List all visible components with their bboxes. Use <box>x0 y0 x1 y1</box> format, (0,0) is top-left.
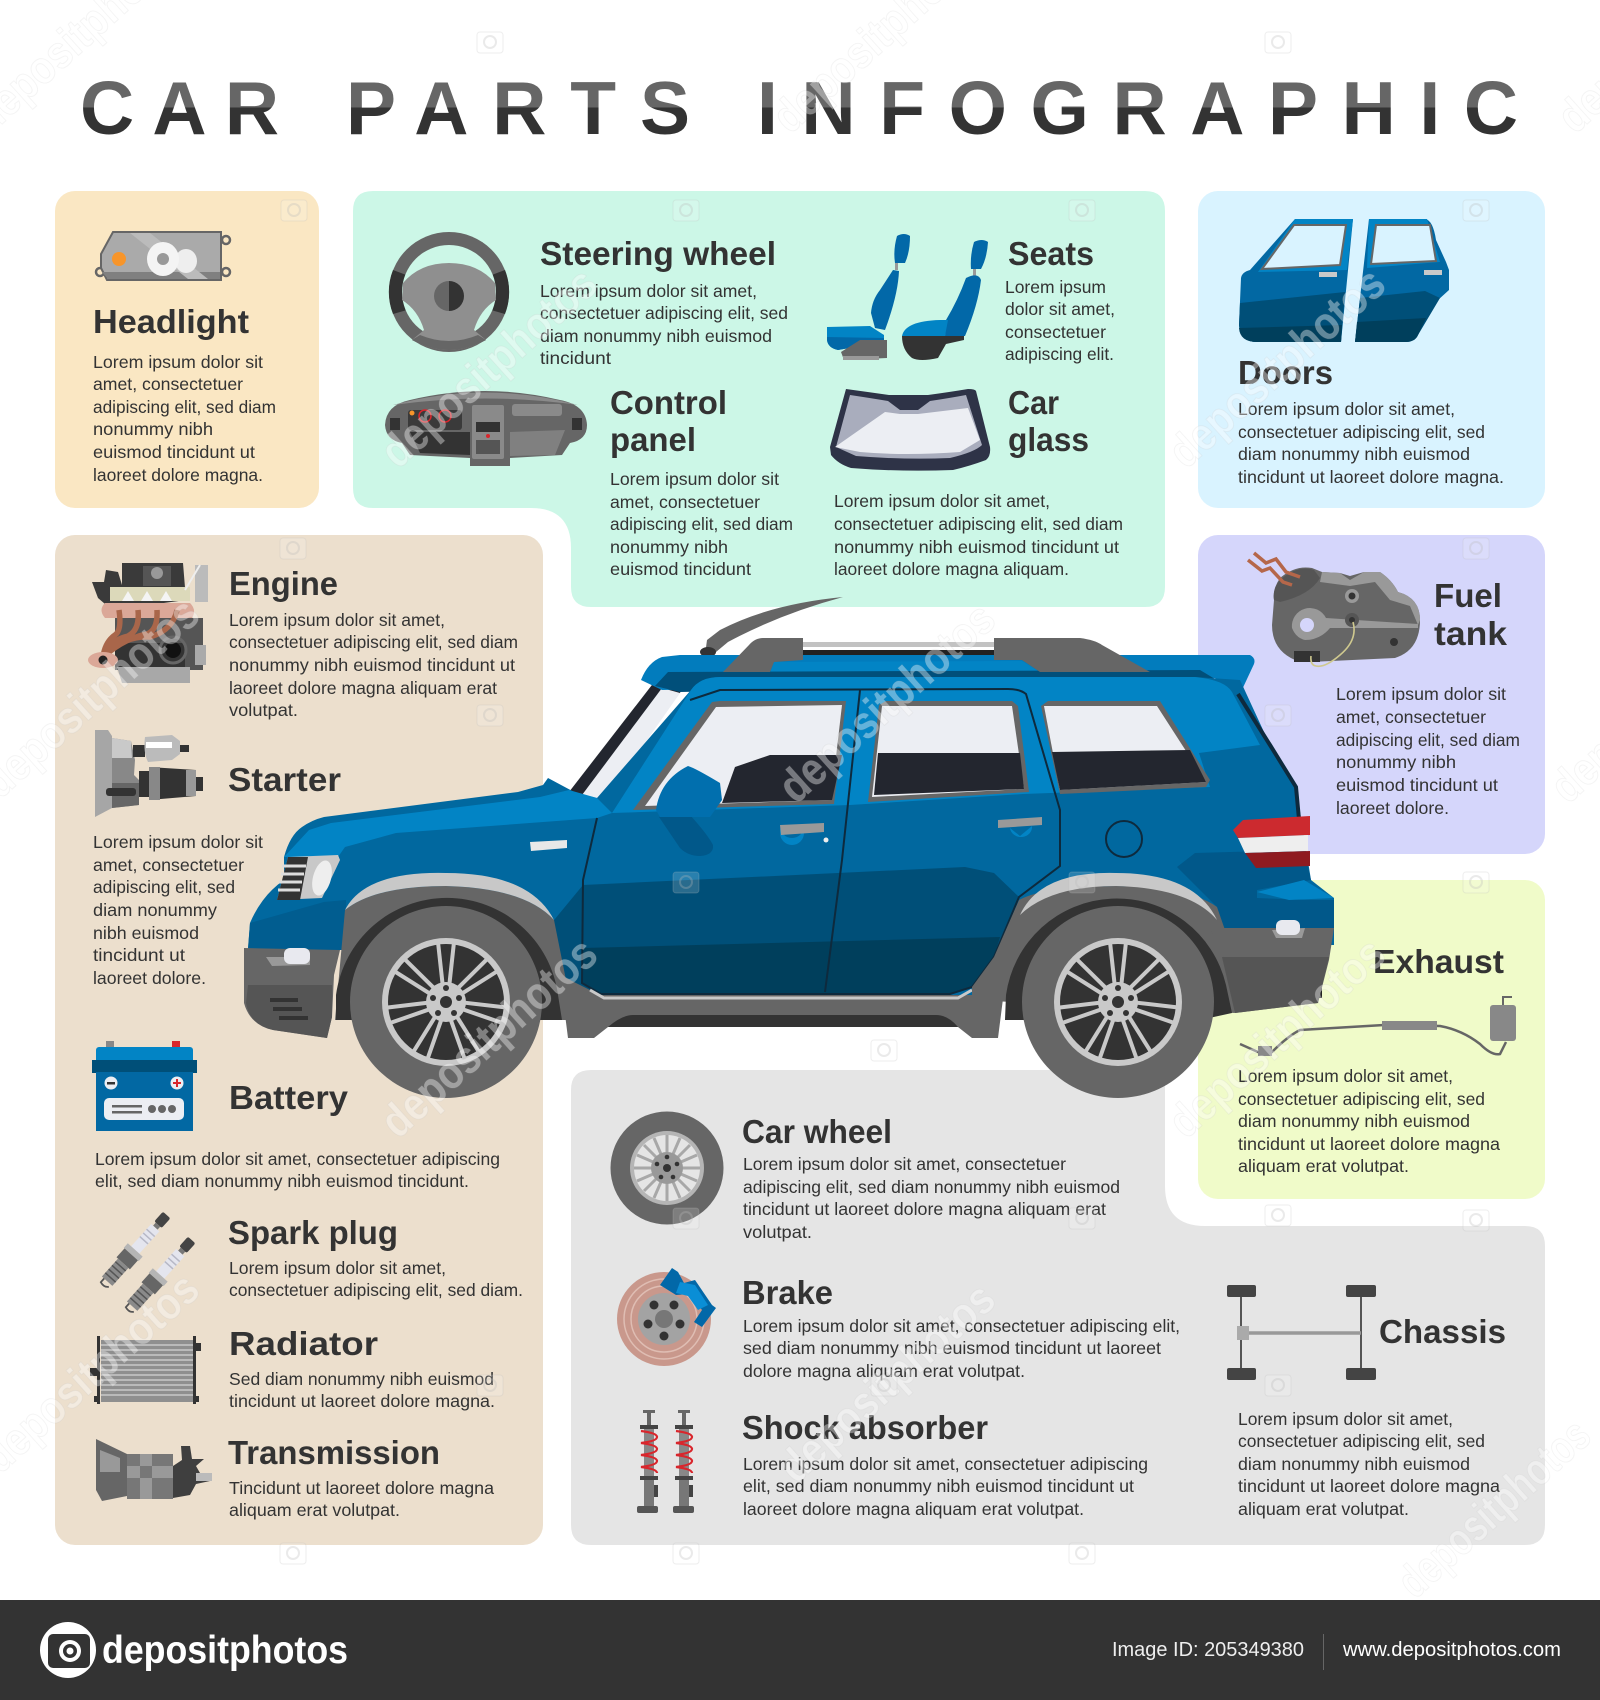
text block: starter: Lorem ipsum dolor sit <box>93 832 263 852</box>
heading: Control panel: panel <box>610 421 696 458</box>
text block: starter: tincidunt ut <box>93 945 185 965</box>
icon: fuel tank <box>1248 553 1420 666</box>
icon: steering wheel <box>389 232 509 352</box>
text block: chassis: aliquam erat volutpat. <box>1238 1499 1409 1519</box>
text block: chassis <box>1238 1409 1500 1519</box>
door lines <box>582 689 1060 994</box>
icon: headlight <box>96 232 230 280</box>
heading: Control panel <box>610 384 727 458</box>
text block: exhaust: Lorem ipsum dolor sit amet, <box>1238 1066 1453 1086</box>
heading: Radiator: Radiator <box>229 1325 378 1362</box>
text block: control panel: nonummy nibh <box>610 537 728 557</box>
text block: fuel tank <box>1336 684 1520 818</box>
text block: car wheel: volutpat. <box>743 1222 812 1242</box>
text block: transmission: aliquam erat volutpat. <box>229 1500 400 1520</box>
icon: spark plugs <box>96 1208 199 1317</box>
website: www.depositphotos.com <box>1342 1639 1561 1661</box>
text block: chassis: diam nonummy nibh euismod <box>1238 1454 1470 1474</box>
icon: battery <box>92 1041 197 1131</box>
text block: chassis: tincidunt ut laoreet dolore magna <box>1238 1476 1500 1496</box>
text block: shock absorber: Lorem ipsum dolor sit amet, consectetuer adipiscing <box>743 1454 1148 1474</box>
text block: starter: amet, consectetuer <box>93 855 244 875</box>
text block: exhaust: aliquam erat volutpat. <box>1238 1156 1409 1176</box>
rear arch <box>972 886 1235 1013</box>
text block: engine <box>229 610 518 720</box>
fuel cap <box>1106 821 1142 857</box>
heading: Fuel tank: tank <box>1434 615 1508 652</box>
text block: battery: elit, sed diam nonummy nibh euismod tincidunt. <box>95 1171 469 1191</box>
window: front <box>633 701 846 810</box>
text block: doors: tincidunt ut laoreet dolore magna. <box>1238 467 1504 487</box>
heading: Battery: Battery <box>229 1079 349 1116</box>
text block: brake <box>743 1316 1180 1381</box>
front arch <box>335 886 570 1020</box>
watermarks: depositphotos <box>1158 927 1395 1147</box>
text block: seats: dolor sit amet, <box>1005 299 1115 319</box>
text block: fuel tank: laoreet dolore. <box>1336 798 1449 818</box>
text block: radiator <box>229 1369 495 1411</box>
headlight <box>277 855 340 900</box>
watermarks: depositphotos <box>370 257 607 477</box>
text block: fuel tank: Lorem ipsum dolor sit <box>1336 684 1506 704</box>
text block: seats: Lorem ipsum <box>1005 277 1106 297</box>
text block: exhaust: consectetuer adipiscing elit, sed <box>1238 1089 1485 1109</box>
tail light <box>1233 816 1310 838</box>
text block: fuel tank: nonummy nibh <box>1336 752 1456 772</box>
heading: Car glass <box>1008 384 1089 458</box>
text block: car wheel: Lorem ipsum dolor sit amet, consectetuer <box>743 1154 1066 1174</box>
panel: exhaust <box>1198 880 1545 1199</box>
side mirror <box>659 815 713 856</box>
heading: Shock absorber: Shock absorber <box>742 1409 988 1446</box>
text block: seats: adipiscing elit. <box>1005 344 1114 364</box>
logo: depositphotos camera <box>40 1622 96 1678</box>
text block: shock absorber <box>743 1454 1148 1519</box>
heading: Exhaust: Exhaust <box>1373 943 1504 980</box>
heading: Seats: Seats <box>1008 235 1094 272</box>
text block: fuel tank: amet, consectetuer <box>1336 707 1486 727</box>
text block: control panel: adipiscing elit, sed diam <box>610 514 793 534</box>
text block: doors: Lorem ipsum dolor sit amet, <box>1238 399 1455 419</box>
panel: running gear <box>571 1070 1545 1545</box>
text block: starter: nibh euismod <box>93 923 199 943</box>
rear wheel <box>1022 906 1214 1098</box>
heading: Headlight: Headlight <box>93 303 249 340</box>
panel: doors <box>1198 191 1545 508</box>
icon: doors <box>1239 219 1449 342</box>
title: PARTS <box>346 66 690 150</box>
window: middle <box>868 701 1029 802</box>
text block: engine: consectetuer adipiscing elit, sed diam <box>229 632 518 652</box>
text block: brake: dolore magna aliquam erat volutpat. <box>743 1361 1025 1381</box>
icon: chassis <box>1227 1285 1376 1380</box>
text block: control panel: Lorem ipsum dolor sit <box>610 469 779 489</box>
text block: exhaust <box>1238 1066 1500 1176</box>
icon: car wheel <box>610 1112 724 1224</box>
text block: engine: laoreet dolore magna aliquam erat <box>229 678 497 698</box>
panel: interior parts <box>353 191 1165 607</box>
text block: engine: nonummy nibh euismod tincidunt ut <box>229 655 515 675</box>
text block: headlight: adipiscing elit, sed diam <box>93 397 276 417</box>
text block: starter <box>93 832 263 988</box>
heading: Starter: Starter <box>228 761 341 798</box>
roof rails <box>723 638 1150 672</box>
text block: seats <box>1005 277 1115 364</box>
text block: headlight: laoreet dolore magna. <box>93 465 263 485</box>
front bumper <box>244 948 340 1038</box>
text block: chassis: consectetuer adipiscing elit, sed <box>1238 1431 1485 1451</box>
heading: Fuel tank <box>1434 577 1508 652</box>
text block: radiator: Sed diam nonummy nibh euismod <box>229 1369 494 1389</box>
text block: car wheel <box>743 1154 1120 1242</box>
logo wordmark: depositphotos <box>102 1629 348 1672</box>
watermarks: depositphotos <box>370 927 607 1147</box>
heading: Fuel tank: Fuel <box>1434 577 1502 614</box>
text block: control panel: amet, consectetuer <box>610 492 760 512</box>
text block: doors: consectetuer adipiscing elit, sed <box>1238 422 1485 442</box>
text block: spark plug <box>229 1258 523 1300</box>
text block: car glass <box>834 491 1123 579</box>
panel: fuel tank <box>1198 535 1545 854</box>
text block: headlight: Lorem ipsum dolor sit <box>93 352 263 372</box>
text block: car wheel: adipiscing elit, sed diam nonummy nibh euismod <box>743 1177 1120 1197</box>
window: rear <box>1041 701 1210 794</box>
panel: headlight <box>55 191 319 508</box>
door handles <box>780 826 804 845</box>
heading: Car glass: glass <box>1008 421 1089 458</box>
watermarks: depositphotos <box>768 592 1005 812</box>
text block: control panel: euismod tincidunt <box>610 559 751 579</box>
text block: battery: Lorem ipsum dolor sit amet, consectetuer adipiscing <box>95 1149 500 1169</box>
icon: seats <box>827 234 988 360</box>
text block: steering wheel <box>540 281 788 368</box>
text block: chassis: Lorem ipsum dolor sit amet, <box>1238 1409 1453 1429</box>
watermarks: depositphotos <box>768 1272 1005 1492</box>
illustration: blue SUV <box>244 597 1334 1098</box>
text block: engine: volutpat. <box>229 700 298 720</box>
icon: shock absorbers <box>637 1410 694 1513</box>
icon: brake <box>617 1268 716 1366</box>
icon: radiator <box>90 1336 201 1404</box>
text block: radiator: tincidunt ut laoreet dolore magna. <box>229 1391 495 1411</box>
text block: exhaust: diam nonummy nibh euismod <box>1238 1111 1470 1131</box>
text block: doors: diam nonummy nibh euismod <box>1238 444 1470 464</box>
roof bars <box>803 642 994 647</box>
text block: starter: adipiscing elit, sed <box>93 877 235 897</box>
text block: car glass: consectetuer adipiscing elit, sed diam <box>834 514 1123 534</box>
icon: exhaust <box>1240 997 1516 1056</box>
text block: starter: diam nonummy <box>93 900 217 920</box>
title: CAR <box>80 66 279 150</box>
text block: starter: laoreet dolore. <box>93 968 206 988</box>
icon: engine <box>88 563 208 683</box>
text block: brake: sed diam nonummy nibh euismod tincidunt ut laoreet <box>743 1338 1161 1358</box>
text block: spark plug: Lorem ipsum dolor sit amet, <box>229 1258 446 1278</box>
rear bumper <box>1210 928 1334 1013</box>
text block: seats: consectetuer <box>1005 322 1106 342</box>
heading: Steering wheel: Steering wheel <box>540 235 776 272</box>
title <box>80 66 1518 150</box>
text block: car glass: laoreet dolore magna aliquam. <box>834 559 1069 579</box>
text block: spark plug: consectetuer adipiscing elit, sed diam. <box>229 1280 523 1300</box>
text block: exhaust: tincidunt ut laoreet dolore magna <box>1238 1134 1500 1154</box>
text block: car glass: Lorem ipsum dolor sit amet, <box>834 491 1050 511</box>
text block: headlight: euismod tincidunt ut <box>93 442 255 462</box>
text block: steering wheel: consectetuer adipiscing elit, sed <box>540 303 788 323</box>
text block: battery <box>95 1149 500 1191</box>
heading: Chassis: Chassis <box>1379 1313 1506 1350</box>
heading: Brake: Brake <box>742 1274 833 1311</box>
text block: headlight: amet, consectetuer <box>93 374 243 394</box>
heading: Transmission: Transmission <box>228 1434 440 1471</box>
heading: Spark plug: Spark plug <box>228 1214 398 1251</box>
text block: steering wheel: Lorem ipsum dolor sit amet, <box>540 281 757 301</box>
icon: transmission <box>96 1439 212 1501</box>
heading: Doors: Doors <box>1238 354 1333 391</box>
text block: fuel tank: adipiscing elit, sed diam <box>1336 730 1520 750</box>
text block: transmission <box>229 1478 494 1520</box>
text block: steering wheel: diam nonummy nibh euismod <box>540 326 772 346</box>
text block: steering wheel: tincidunt <box>540 348 611 368</box>
heading: Car glass: Car <box>1008 384 1059 421</box>
watermarks: depositphotos <box>1158 257 1395 477</box>
text block: headlight <box>93 352 276 485</box>
panel: engine parts <box>55 535 543 1545</box>
heading: Control panel: Control <box>610 384 727 421</box>
text block: shock absorber: laoreet dolore magna aliquam erat volutpat. <box>743 1499 1084 1519</box>
text block: fuel tank: euismod tincidunt ut <box>1336 775 1498 795</box>
text block: car glass: nonummy nibh euismod tincidunt ut <box>834 537 1119 557</box>
front wheel <box>350 906 542 1098</box>
sill <box>560 975 1005 1038</box>
text block: doors <box>1238 399 1504 487</box>
text block: brake: Lorem ipsum dolor sit amet, consectetuer adipiscing elit, <box>743 1316 1180 1336</box>
icon: starter <box>95 730 203 817</box>
text block: transmission: Tincidunt ut laoreet dolore magna <box>229 1478 494 1498</box>
footer bar <box>0 1600 1600 1700</box>
text block: engine: Lorem ipsum dolor sit amet, <box>229 610 445 630</box>
heading: Engine: Engine <box>229 565 338 602</box>
heading: Car wheel: Car wheel <box>742 1113 892 1150</box>
text block: control panel <box>610 469 793 579</box>
icon: control panel <box>385 391 587 466</box>
icon: car glass <box>830 389 990 471</box>
image id: Image ID: 205349380 <box>1112 1639 1304 1661</box>
text block: shock absorber: elit, sed diam nonummy nibh euismod tincidunt ut <box>743 1476 1134 1496</box>
text block: car wheel: tincidunt ut laoreet dolore magna aliquam erat <box>743 1199 1106 1219</box>
title: INFOGRAPHIC <box>757 66 1518 150</box>
text block: headlight: nonummy nibh <box>93 419 213 439</box>
